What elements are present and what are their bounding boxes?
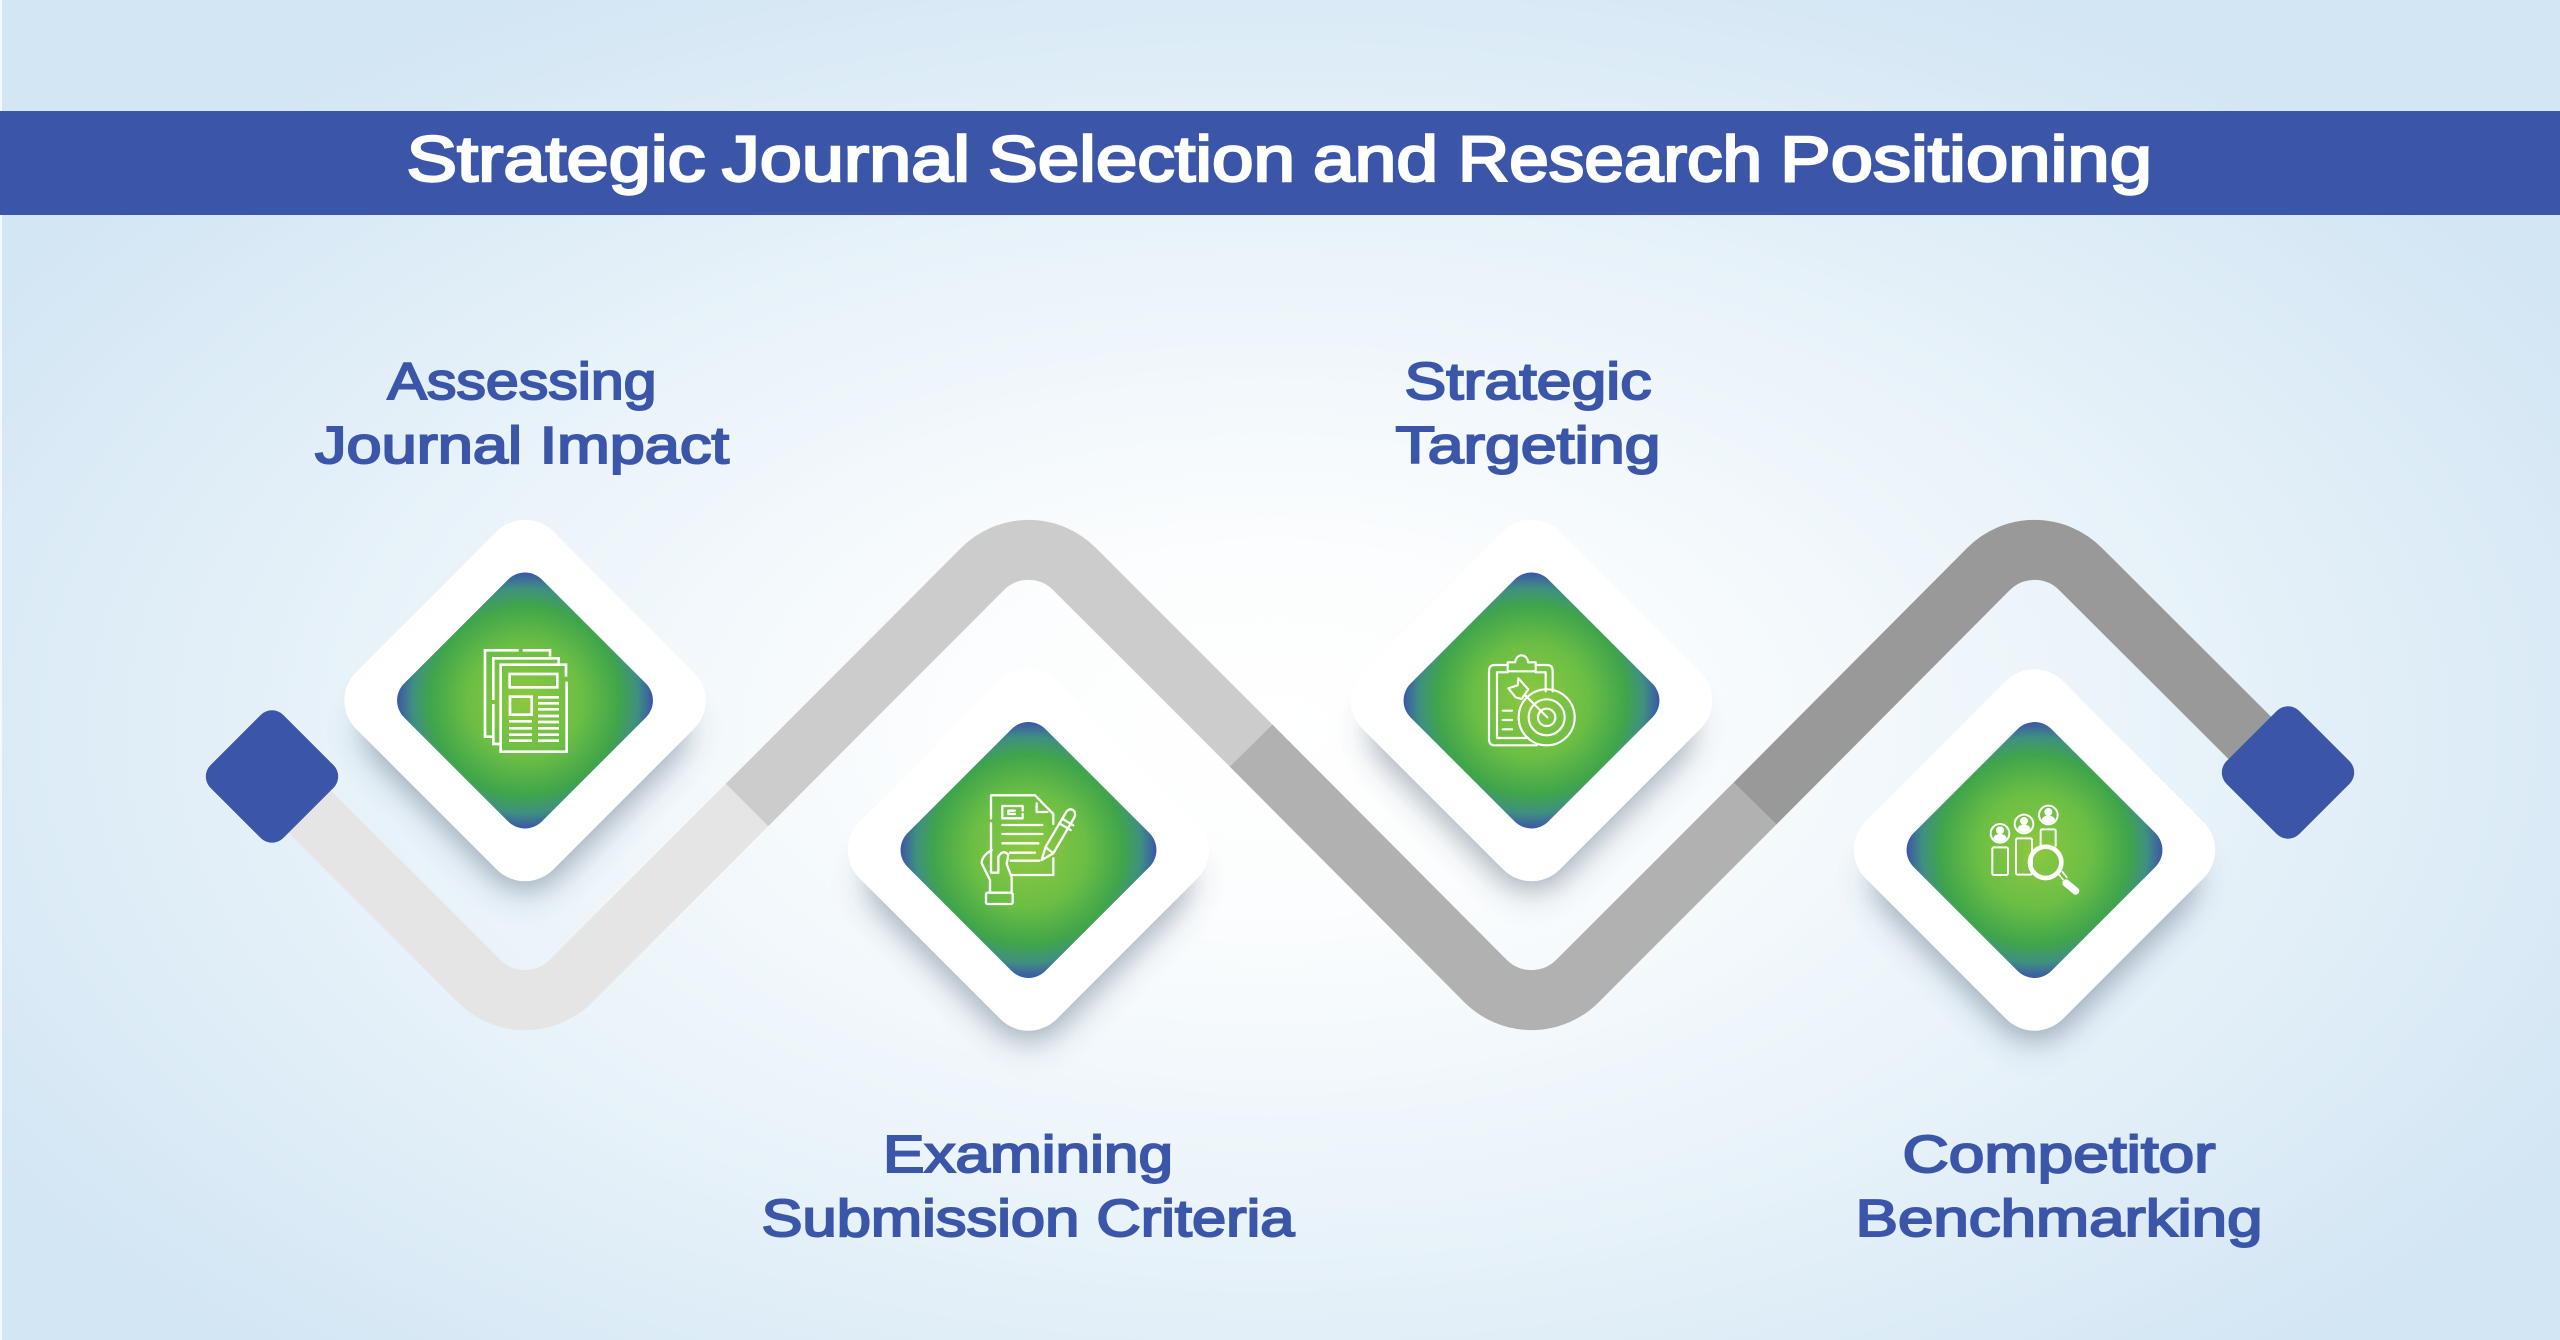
title banner xyxy=(0,111,2560,215)
start node xyxy=(199,704,345,849)
title: Research xyxy=(1458,123,1762,195)
icon: clipboard and target xyxy=(1489,655,1575,745)
label: competitor benchmarking: Competitor xyxy=(1902,1126,2216,1184)
label: examining submission criteria: Examining xyxy=(883,1126,1173,1184)
label: strategic targeting xyxy=(1396,353,1660,475)
path segment 2 xyxy=(747,550,1251,805)
zigzag path xyxy=(272,550,2288,1000)
title: Selection xyxy=(988,123,1295,195)
title: Journal xyxy=(722,123,970,195)
label: strategic targeting: Targeting xyxy=(1396,417,1660,475)
icon: ranked people and magnifier xyxy=(1991,806,2076,891)
path segment 3 xyxy=(1251,746,1755,1000)
label: assessing journal impact: Journal Impact xyxy=(315,417,730,475)
title: Positioning xyxy=(1780,123,2152,195)
title: Strategic xyxy=(406,123,706,195)
end node xyxy=(2215,700,2361,845)
label: competitor benchmarking: Benchmarking xyxy=(1856,1190,2262,1248)
step 4: competitor benchmarking xyxy=(1837,653,2232,1057)
step 3: strategic targeting xyxy=(1334,503,1729,907)
label: examining submission criteria: Submission Criteria xyxy=(762,1190,1295,1248)
label: examining submission criteria xyxy=(762,1126,1295,1248)
label: strategic targeting: Strategic xyxy=(1404,353,1652,411)
icon: document and pencil in hand xyxy=(982,795,1075,904)
step 2: examining submission criteria xyxy=(831,653,1226,1057)
title: and xyxy=(1313,123,1438,195)
label: competitor benchmarking xyxy=(1856,1126,2262,1248)
path segment 4 xyxy=(1755,550,2288,804)
path segment 1 xyxy=(272,774,747,1000)
label: assessing journal impact xyxy=(315,353,730,475)
step 1: assessing journal impact xyxy=(328,503,722,907)
label: assessing journal impact: Assessing xyxy=(388,353,656,411)
icon: newspaper xyxy=(485,650,567,752)
